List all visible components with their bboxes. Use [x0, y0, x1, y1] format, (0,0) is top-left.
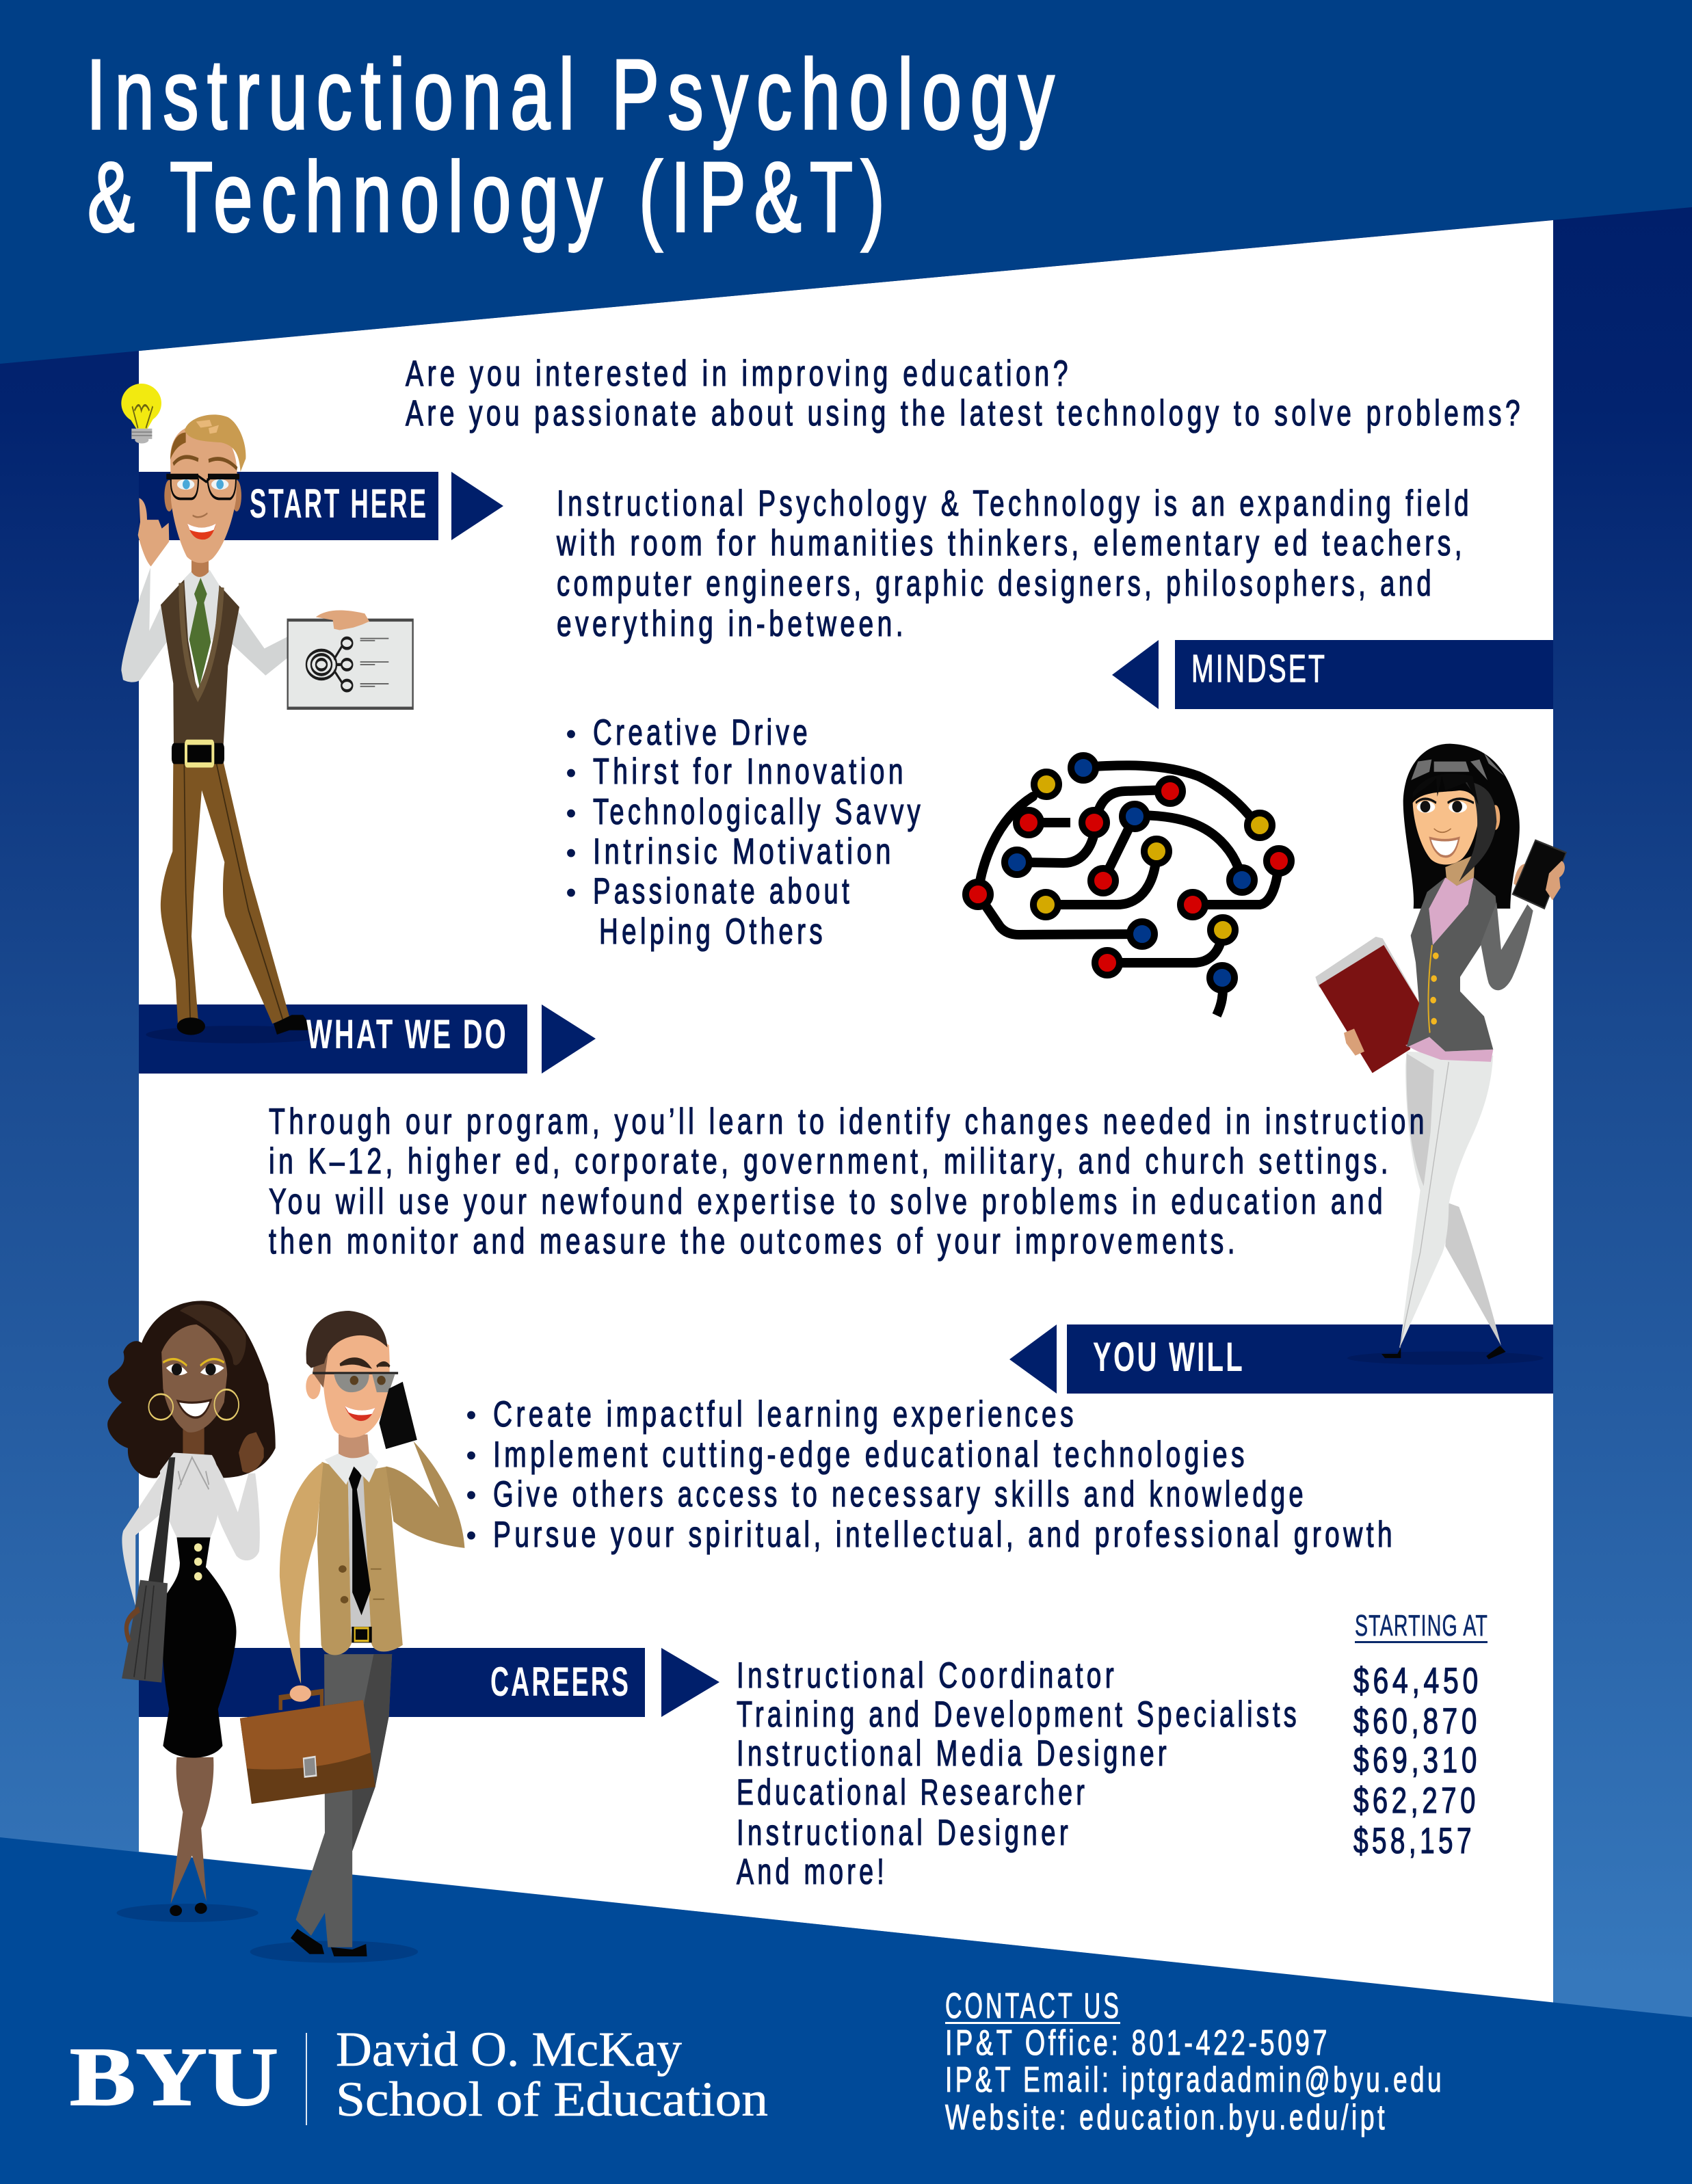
- banner: mindset: MINDSET: [1191, 647, 1327, 691]
- legs: [171, 1757, 213, 1904]
- mindset list: Technologically Savvy: [593, 792, 924, 832]
- logo: BYU David O. McKay School of Education: School of Education: [336, 2072, 768, 2127]
- hair: [107, 1301, 276, 1478]
- you will list: Create impactful learning experiences: [493, 1394, 1077, 1435]
- hand pointing: [138, 498, 169, 566]
- trousers: [296, 1654, 392, 1947]
- logo: BYU David O. McKay School of Education: BYU: [70, 2031, 278, 2123]
- shirt: [347, 1471, 371, 1629]
- hair: [1403, 744, 1520, 909]
- shirt collar: [184, 570, 220, 640]
- pants: [161, 762, 289, 1024]
- mouth: [187, 524, 216, 540]
- you will list: •: [466, 1400, 476, 1430]
- mouth: [345, 1406, 375, 1421]
- header band: [0, 0, 1692, 364]
- footer band: [0, 1837, 1692, 2184]
- belt: [172, 742, 224, 765]
- neck: [339, 1435, 369, 1458]
- banner: start here: START HERE: [250, 481, 428, 527]
- eyes: [177, 479, 194, 490]
- careers list: Training and Development Specialists: [737, 1694, 1300, 1735]
- phone: [379, 1382, 417, 1449]
- salary list: $69,310: [1353, 1740, 1481, 1781]
- mouth: [1430, 838, 1459, 857]
- mindset list: Intrinsic Motivation: [593, 831, 895, 872]
- arm to card: [232, 611, 289, 676]
- hand waving: [239, 1432, 264, 1473]
- bag: [122, 1457, 175, 1683]
- salary list: $60,870: [1353, 1701, 1481, 1742]
- shoes: [291, 1929, 367, 1956]
- face: [1413, 790, 1479, 865]
- mindset list: Helping Others: [599, 911, 826, 952]
- hand on card: [316, 610, 369, 630]
- banner: mindset: [1112, 640, 1553, 709]
- glasses: [166, 476, 239, 498]
- contact block: CONTACT US: [945, 1986, 1122, 2026]
- hoop earrings: [148, 1394, 173, 1420]
- you will list: Pursue your spiritual, intellectual, and professional growth: [493, 1515, 1396, 1555]
- bangs: [1413, 774, 1479, 805]
- logo: BYU David O. McKay School of Education: David O. McKay: [336, 2022, 682, 2077]
- icon: lightbulb: [121, 384, 161, 443]
- contact block: Website: education.byu.edu/ipt: [945, 2098, 1388, 2138]
- intro questions: Are you interested in improving education?: [406, 354, 1072, 394]
- field description paragraph: everything in-between.: [557, 604, 907, 644]
- banner: you will: [1009, 1324, 1553, 1394]
- you will list: •: [466, 1480, 476, 1510]
- banner: what we do: [139, 1004, 596, 1074]
- hand on book: [1344, 1028, 1364, 1056]
- banner: start here: [139, 472, 503, 540]
- blouse: [1429, 877, 1474, 945]
- title: Instructional Psychology: [86, 39, 1063, 150]
- shoes: [1382, 1346, 1506, 1359]
- title: [86, 39, 1063, 252]
- salary list: $62,270: [1353, 1781, 1479, 1821]
- mindset list: [566, 713, 924, 952]
- you will list: Give others access to necessary skills and knowledge: [493, 1474, 1307, 1515]
- eyes: [166, 1364, 224, 1375]
- salary list: [1353, 1661, 1482, 1861]
- tie: [347, 1464, 371, 1615]
- you will list: Implement cutting-edge educational technologies: [493, 1435, 1248, 1475]
- mindset list: Creative Drive: [593, 713, 811, 753]
- back leg: [1445, 1203, 1501, 1346]
- hair: [170, 433, 186, 460]
- you will list: •: [466, 1521, 476, 1551]
- contact block: IP&T Office: 801-422-5097: [945, 2023, 1330, 2063]
- belt: [352, 1627, 372, 1642]
- shoes: [177, 1015, 313, 1035]
- careers list: [737, 1655, 1300, 1892]
- intro questions: [406, 354, 1524, 434]
- what we do paragraph: then monitor and measure the outcomes of your improvements.: [269, 1221, 1239, 1262]
- face: [161, 1324, 227, 1433]
- buttons: [1428, 945, 1439, 1033]
- eyebrows: [340, 1359, 390, 1367]
- careers list: Instructional Designer: [737, 1813, 1072, 1853]
- arm down: [280, 1462, 323, 1684]
- face: [170, 426, 237, 563]
- collar: [325, 1453, 378, 1484]
- neck: [1445, 855, 1475, 885]
- arm up: [386, 1441, 464, 1548]
- arm: [1481, 903, 1533, 990]
- eyes: [1417, 801, 1435, 813]
- banner: careers: CAREERS: [490, 1659, 631, 1705]
- side hair: [1459, 780, 1496, 881]
- field description paragraph: [556, 483, 1472, 644]
- skirt: [162, 1537, 237, 1758]
- blouse: [160, 1453, 220, 1537]
- front leg: [1400, 1052, 1493, 1348]
- character: man with lightbulb and card: [121, 384, 413, 1043]
- character: woman with book and phone: [1315, 744, 1566, 1365]
- ear: [306, 1374, 321, 1399]
- icon: circuit brain: [966, 756, 1291, 1015]
- neck: [191, 557, 209, 577]
- panel: white content area: [139, 220, 1553, 2003]
- mindset list: Passionate about: [593, 871, 853, 911]
- mindset list: •: [566, 799, 576, 829]
- character: man with phone and briefcase: [240, 1311, 464, 1962]
- mindset list: •: [566, 758, 576, 788]
- arm raised: [121, 568, 167, 682]
- salary heading: [1355, 1609, 1488, 1643]
- contact block: IP&T Email: iptgradadmin@byu.edu: [945, 2060, 1444, 2100]
- briefcase: [240, 1686, 375, 1804]
- careers list: And more!: [737, 1852, 888, 1892]
- mindset list: •: [566, 719, 576, 749]
- mindset list: •: [566, 878, 576, 908]
- mouth: [178, 1400, 211, 1417]
- book: [1315, 937, 1420, 1073]
- mindset list: •: [566, 838, 576, 868]
- shoes: [170, 1905, 182, 1916]
- what we do paragraph: [269, 1102, 1428, 1262]
- salary list: $64,450: [1353, 1661, 1482, 1701]
- heading: what we do: WHAT WE DO: [306, 1011, 508, 1057]
- logo: BYU David O. McKay School of Education: [70, 2022, 768, 2127]
- salary list: $58,157: [1353, 1821, 1475, 1861]
- glasses: [313, 1373, 398, 1392]
- careers list: Educational Researcher: [737, 1772, 1088, 1813]
- banner: you will: YOU WILL: [1093, 1334, 1245, 1380]
- tie: [189, 578, 211, 687]
- icon: presentation card: [288, 620, 413, 708]
- title: & Technology (IP&T): [88, 142, 893, 252]
- contact block: [945, 1986, 1444, 2138]
- banner: careers: [139, 1648, 719, 1717]
- neck: [183, 1425, 204, 1457]
- mindset list: Thirst for Innovation: [593, 751, 907, 792]
- vest: [161, 580, 239, 745]
- you will list: [466, 1394, 1396, 1555]
- character: woman with bag: [107, 1301, 276, 1922]
- jacket: [1407, 877, 1501, 1052]
- jacket: [317, 1462, 403, 1655]
- hair: [306, 1311, 387, 1387]
- phone and hand: [1513, 840, 1566, 909]
- careers list: Instructional Coordinator: [737, 1655, 1118, 1696]
- ears: [164, 480, 174, 511]
- careers list: Instructional Media Designer: [737, 1733, 1170, 1774]
- salary heading: STARTING AT: [1355, 1609, 1488, 1642]
- you will list: •: [466, 1441, 476, 1471]
- ear: [1491, 805, 1500, 830]
- face: [323, 1334, 390, 1438]
- eyebrows: [173, 457, 237, 468]
